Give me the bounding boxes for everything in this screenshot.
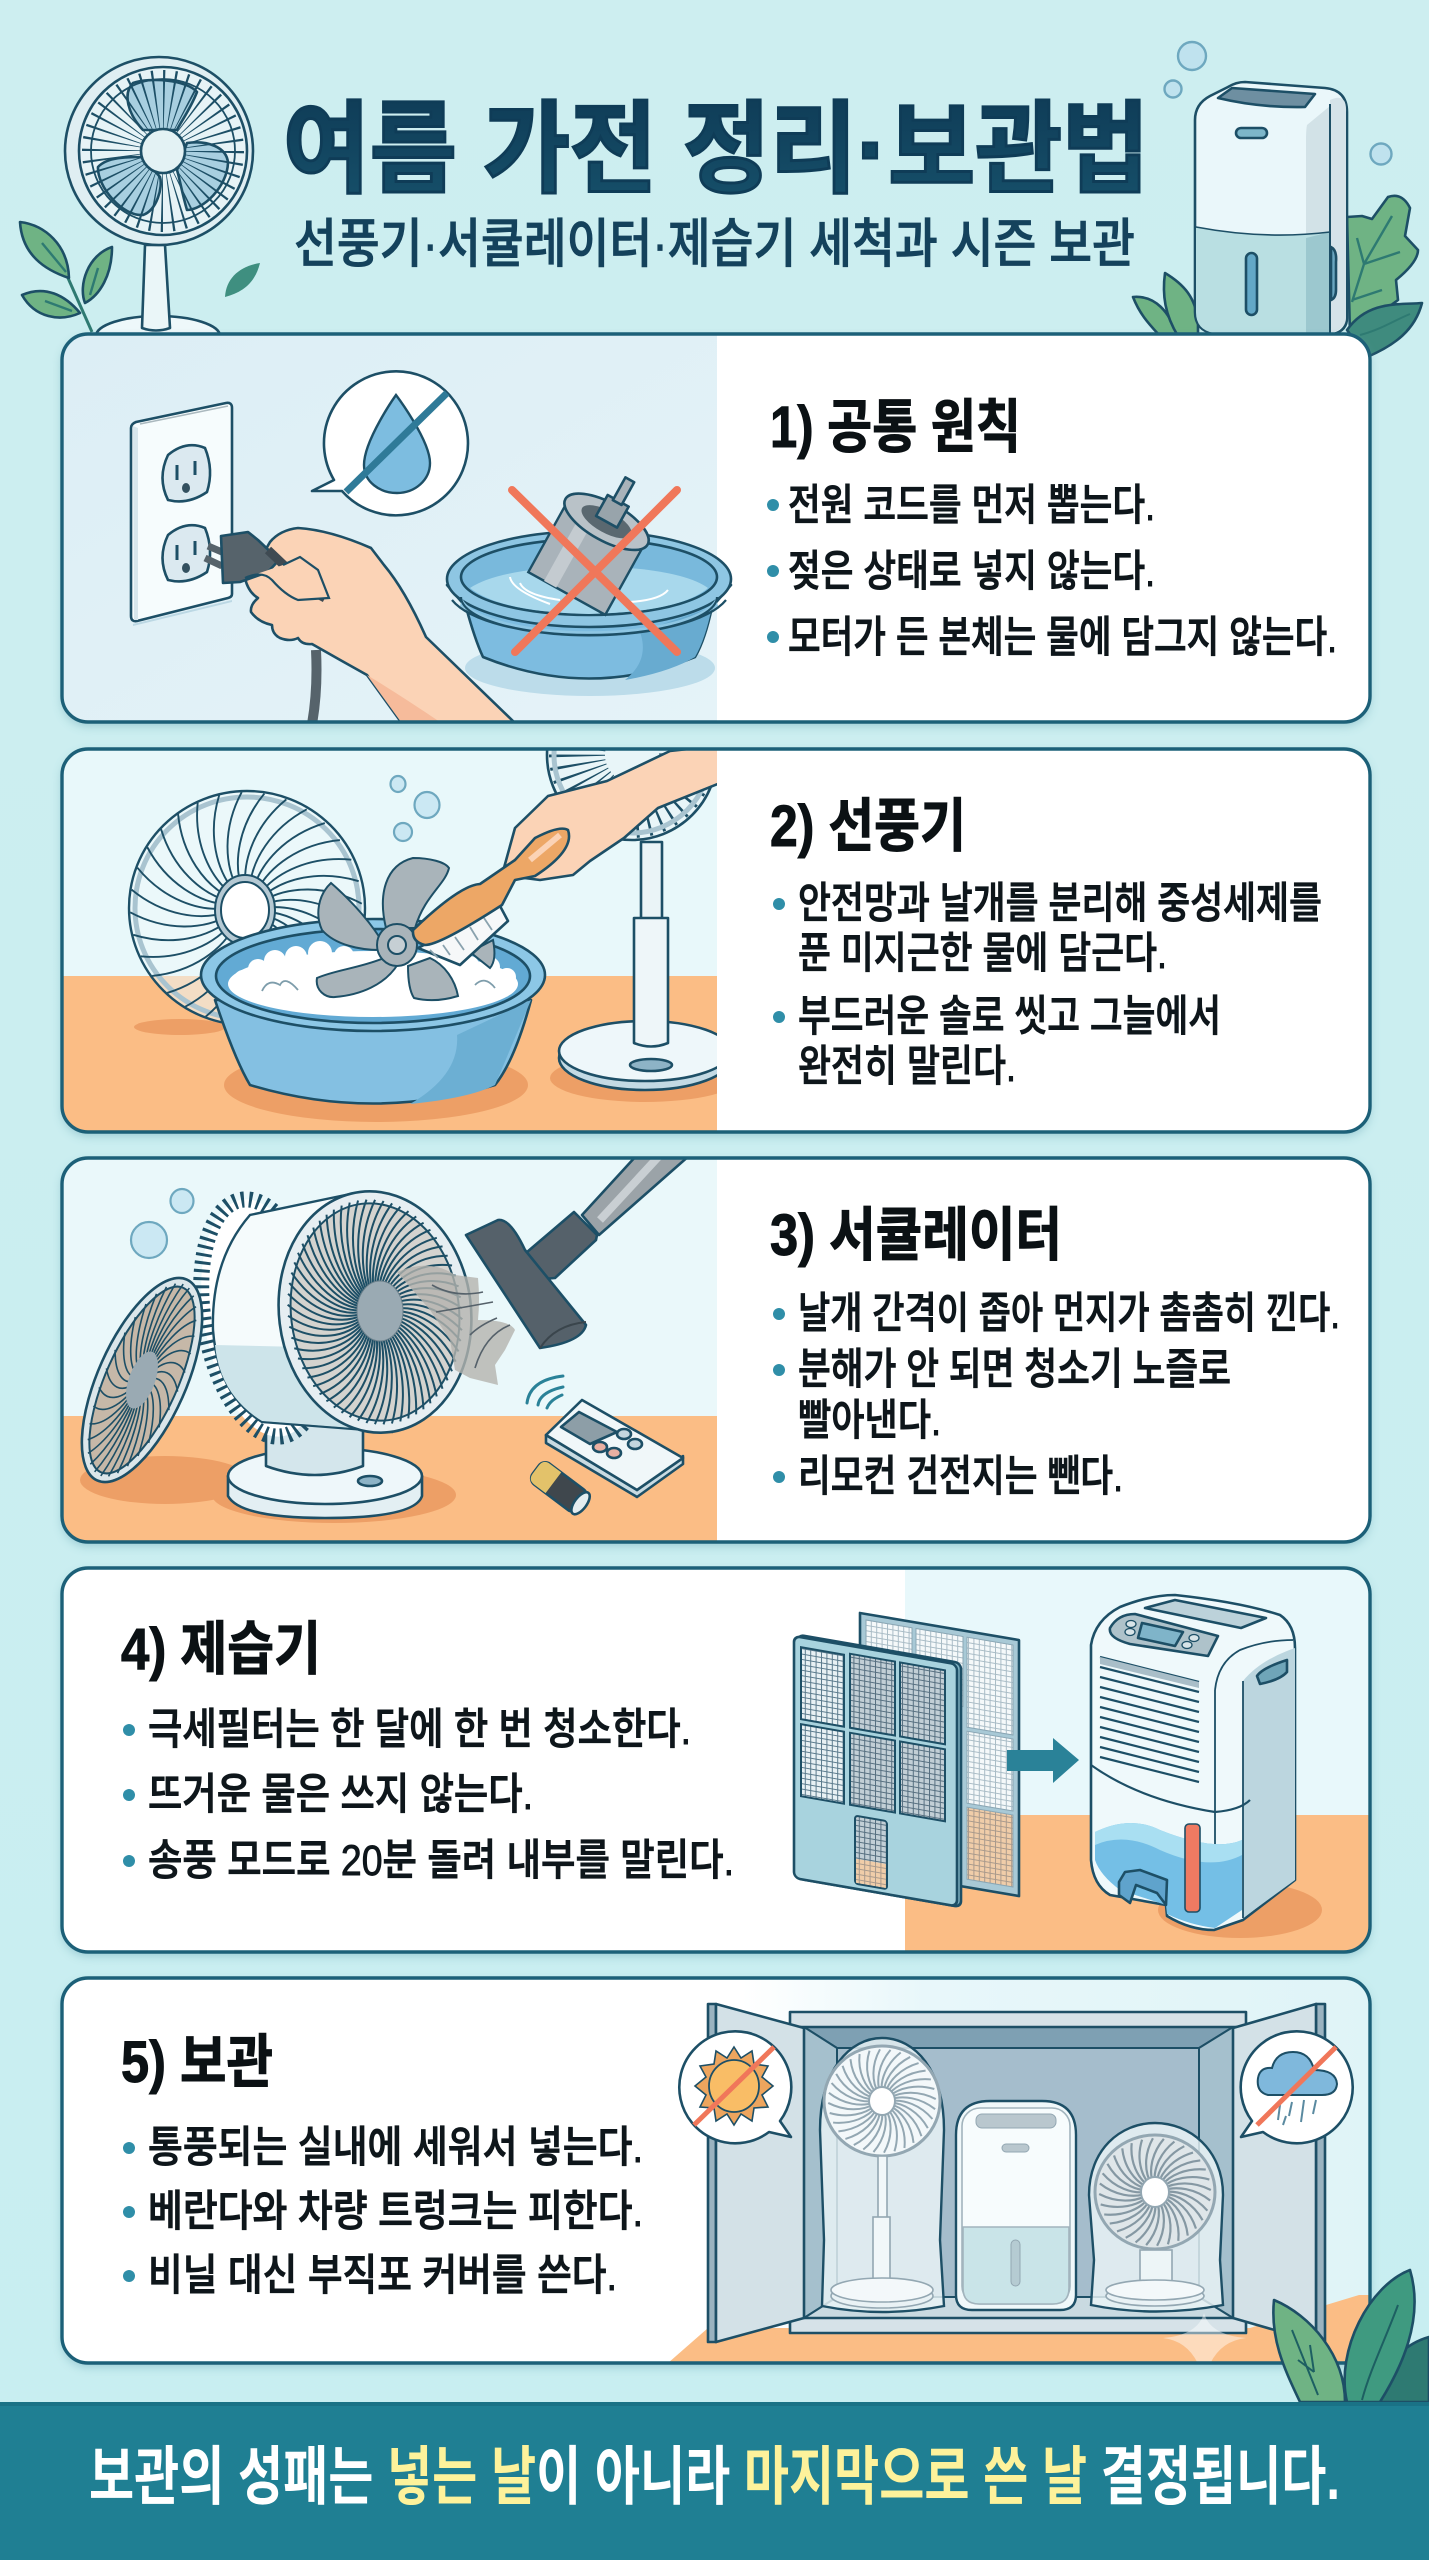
- icon: dust cloud: [397, 1266, 515, 1385]
- icon: right leaves: [1133, 196, 1422, 357]
- bullet list: 전원 코드를 먼저 뽑는다.: [788, 482, 1155, 530]
- heading: 4) 제습기: [121, 1617, 321, 1682]
- icon: front filter: [794, 1634, 961, 1907]
- icon: circulator base: [228, 1421, 422, 1518]
- icon: right door: [1233, 2004, 1325, 2342]
- bullet list: 통풍되는 실내에 세워서 넣는다.: [148, 2124, 643, 2172]
- icon: desk fan: [65, 57, 253, 356]
- bullet list: 푼 미지근한 물에 담근다.: [798, 930, 1167, 978]
- illustration: vacuum circulator: [46, 1143, 717, 1542]
- bullet list: [123, 2124, 643, 2300]
- footer message: 보관의 성패는 넣는 날이 아니라 마지막으로 쓴 날 결정됩니다.: [89, 2441, 1340, 2513]
- subtitle: 선풍기·서큘레이터·제습기 세척과 시즌 보관: [294, 215, 1135, 274]
- bullet list: 부드러운 솔로 씻고 그늘에서: [798, 993, 1221, 1041]
- icon: no water bubble: [312, 371, 468, 515]
- panel: 1) 공통 원칙: [62, 334, 1370, 726]
- icon: standing fan: [546, 750, 717, 1092]
- icon: soap bubbles: [390, 776, 440, 841]
- icon: hand pulling plug: [205, 528, 514, 722]
- icon: left door: [708, 2004, 804, 2342]
- icon: removed front grill: [80, 1276, 204, 1484]
- illustration: unplug cord: [62, 334, 717, 724]
- icon: vacuum nozzle: [466, 1155, 690, 1348]
- bullet list: 안전망과 날개를 분리해 중성세제를: [798, 880, 1322, 928]
- icon: remote signal: [527, 1376, 563, 1408]
- bullet list: 베란다와 차량 트렁크는 피한다.: [148, 2188, 643, 2236]
- card outline: [62, 749, 1370, 1132]
- card outline: [62, 1568, 1370, 1952]
- icon: bottom right leaves: [1273, 2270, 1429, 2402]
- icon: no rain bubble: [1241, 2031, 1353, 2143]
- bullet list: 비닐 대신 부직포 커버를 쓴다.: [148, 2252, 617, 2300]
- icon: hand: [502, 745, 725, 880]
- heading: 5) 보관: [121, 2030, 273, 2095]
- footer banner: [0, 2402, 1429, 2560]
- card outline: [62, 334, 1370, 722]
- illustration: wash fan parts: [64, 750, 717, 1130]
- icon: wall outlet: [131, 403, 232, 626]
- icon: bubbles: [1164, 42, 1392, 164]
- icon: covered dehumidifier: [956, 2101, 1076, 2310]
- icon: dehumidifier top: [1195, 82, 1347, 334]
- icon: fan blades: [317, 858, 494, 1000]
- panel: 2) 선풍기: [58, 747, 1374, 1140]
- icon: back filter: [860, 1613, 1019, 1896]
- icon: battery: [530, 1461, 591, 1516]
- icon: sparkle: [1163, 2313, 1246, 2383]
- bullet list: 분해가 안 되면 청소기 노즐로: [798, 1346, 1231, 1394]
- title: 여름 가전 정리·보관법: [283, 94, 1149, 206]
- bullet list: 빨아낸다.: [798, 1397, 941, 1445]
- illustration background: [905, 1568, 1370, 1952]
- icon: basin with suds: [201, 919, 545, 1104]
- panel: 5) 보관: [62, 1978, 1370, 2383]
- heading: 1) 공통 원칙: [770, 395, 1021, 460]
- bullet list: 극세필터는 한 달에 한 번 청소한다.: [148, 1706, 691, 1754]
- bullet list: 젖은 상태로 넣지 않는다.: [788, 548, 1155, 596]
- card outline: [62, 1158, 1370, 1542]
- icon: basin with motor: [447, 457, 731, 680]
- bullet list: 완전히 말린다.: [798, 1043, 1016, 1091]
- bullet list: 송풍 모드로 20분 돌려 내부를 말린다.: [148, 1837, 734, 1885]
- icon: dehumidifier: [1091, 1595, 1295, 1930]
- bullet list: [773, 1290, 1340, 1501]
- icon: left leaves: [20, 222, 260, 332]
- icon: brush: [413, 829, 569, 965]
- icon: remote control: [546, 1400, 683, 1497]
- icon: circulator body: [193, 1190, 473, 1444]
- icon: detached safety grill: [128, 790, 366, 1024]
- icon: red cross: [512, 490, 677, 652]
- card outline: [62, 1978, 1370, 2363]
- panel: 4) 제습기: [62, 1568, 1370, 1956]
- panel: 3) 서큘레이터: [46, 1143, 1370, 1546]
- icon: bubbles: [131, 1189, 194, 1258]
- bullet list: 뜨거운 물은 쓰지 않는다.: [148, 1771, 533, 1819]
- bullet list: [773, 880, 1322, 1091]
- bullet list: [123, 1706, 734, 1885]
- icon: no sun bubble: [679, 2031, 791, 2143]
- bullet list: [767, 482, 1337, 662]
- illustration: storage cabinet: [668, 2004, 1370, 2383]
- icon: covered standing fan: [814, 2036, 950, 2312]
- heading: 3) 서큘레이터: [770, 1203, 1062, 1268]
- icon: cord: [312, 650, 316, 724]
- icon: covered circulator: [1085, 2123, 1225, 2312]
- heading: 2) 선풍기: [770, 794, 966, 859]
- arrow: [1007, 1738, 1079, 1783]
- bullet list: 리모컨 건전지는 뺀다.: [798, 1453, 1123, 1501]
